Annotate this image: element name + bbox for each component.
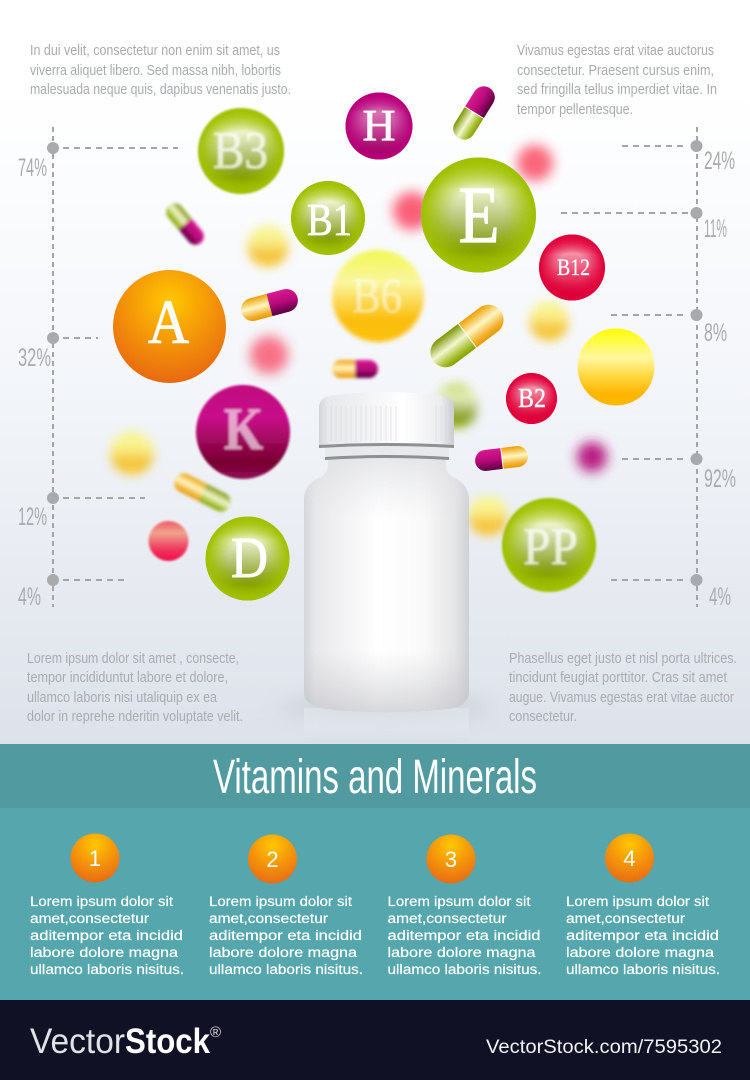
blurred red sphere [393,192,431,230]
vitamin B3 sphere: B3 [213,122,268,180]
blurred green sphere [434,384,478,428]
text block: top right [517,43,717,118]
vitamin H sphere: H [362,101,396,150]
step 3: labore dolore magna [388,945,536,960]
blurred yellow sphere [468,496,508,536]
step 3: 3 [445,847,457,872]
step 3: Lorem ipsum dolor sit [388,894,531,909]
step 2: amet,consectetur [209,911,329,926]
vitamin D sphere: D [231,525,268,590]
panel: steps [0,808,750,1000]
step 4: ullamco laboris nisitus. [566,962,720,977]
yellow sphere [578,328,654,406]
vitamin PP sphere [502,498,596,592]
step 4: aditempor eta incidid [566,928,719,943]
text block: top left [30,43,291,98]
vitamin B6 sphere: B6 [352,267,402,323]
vitamin B3 sphere [198,108,284,194]
text block: top left: In dui velit, consectetur non enim sit amet, us [30,43,280,59]
text block: bottom left: tempor incididuntut labore et dolore, [27,670,228,686]
step 3 [388,834,542,977]
step 1: aditempor eta incidid [30,928,183,943]
step 1: ullamco laboris nisitus. [30,962,184,977]
marker 11% [561,207,727,243]
blurred red sphere [250,336,288,374]
bottle body [304,458,469,712]
vitamin E sphere [421,158,536,272]
marker 4% right: 4% [709,583,731,611]
vitamin B2 sphere: B2 [518,383,546,413]
footer logo: Vector [30,1022,125,1061]
vitamin D sphere [206,516,290,600]
bottle reflection [304,708,469,743]
capsule: orange and magenta, blurred [332,360,378,378]
vitamin H sphere [346,92,412,160]
vitamin A sphere: A [148,289,189,357]
step 2: 2 [266,847,279,872]
bottle [278,392,494,743]
step 4 [566,834,720,977]
marker 12%: 12% [18,503,47,531]
capsule: magenta and orange [474,445,529,472]
vitamin PP sphere: PP [523,518,578,576]
blurred yellow sphere [110,431,154,475]
text block: top right: sed fringilla tellus imperdiet vitae. In [517,82,717,98]
bottle shadow [278,699,494,717]
step 1: 1 [89,846,101,871]
vitamin E sphere: E [458,172,500,260]
marker 32% [18,332,98,372]
step 1: labore dolore magna [30,945,179,960]
step 2: labore dolore magna [209,945,358,960]
step 3: amet,consectetur [388,911,507,926]
marker 8% [611,309,727,347]
vitamin B1 sphere [291,181,365,255]
footer logo: Stock [125,1022,210,1061]
capsule: green and magenta, blurred [163,200,207,248]
vitamin B12 sphere: B12 [557,255,590,280]
marker 92% [622,453,736,493]
step 2 [209,834,363,977]
step 1 [30,834,184,977]
marker 32%: 32% [18,344,51,372]
footer logo [30,1022,221,1061]
text block: bottom right: consectetur. [509,709,577,725]
marker 74% [18,142,178,182]
title: Vitamins and Minerals [213,751,537,804]
text block: bottom left: Lorem ipsum dolor sit amet , consecte, [27,651,239,667]
text block: bottom left [27,651,243,725]
step 4: amet,consectetur [566,911,686,926]
blurred background spheres [110,145,607,536]
step 1: Lorem ipsum dolor sit [30,894,173,909]
text block: bottom right [509,651,737,725]
vitamin B6 sphere [332,250,424,342]
footer logo: ® [210,1024,221,1041]
title band [0,744,750,808]
text block: bottom left: dolor in reprehe nderitin voluptate velit. [27,709,243,725]
blurred red sphere [517,145,553,181]
vitamin B1 sphere: B1 [307,195,352,245]
vitamin A sphere [113,270,226,383]
marker 8%: 8% [704,319,727,347]
small red sphere [148,521,188,561]
bottle neck [325,446,449,460]
blurred magenta sphere [577,442,607,472]
bottle cap [319,392,454,448]
step 3: aditempor eta incidid [388,928,540,943]
blurred yellow sphere [247,225,289,267]
step 2: ullamco laboris nisitus. [209,962,363,977]
step 4: 4 [623,846,636,871]
capsule: large green and orange [424,299,510,373]
text block: top right: Vivamus egestas erat vitae auctorus [517,43,714,59]
marker 12% [18,492,145,531]
text block: bottom right: tincidunt feugiat porttitor. Cras sit amet [509,670,727,686]
text block: bottom left: ullamco laboris nisi utaliquip ex ea [27,690,218,706]
step 3: ullamco laboris nisitus. [388,962,542,977]
blurred yellow sphere [529,301,569,341]
text block: top left: viverra aliquet libero. Sed massa nibh, lobortis [30,63,281,79]
marker 4% right [611,574,731,611]
left percentage scale [18,127,178,611]
step 1: amet,consectetur [30,911,150,926]
step 4: labore dolore magna [566,945,715,960]
step 4: Lorem ipsum dolor sit [566,894,709,909]
step 2: aditempor eta incidid [209,928,362,943]
capsule: orange and green, blurred [171,470,234,515]
text block: top right: tempor pellentesque. [517,102,633,118]
marker 74%: 74% [18,154,47,182]
text block: top right: consectetur. Praesent cursus enim, [517,63,714,79]
marker 4% [18,574,124,611]
text block: top left: malesuada neque quis, dapibus venenatis justo. [30,82,291,98]
footer image id: VectorStock.com/7595302 [486,1037,722,1058]
vitamin B12 sphere [539,234,605,300]
capsule: orange and magenta [239,286,300,324]
marker 4%: 4% [18,583,41,611]
marker 24% [622,140,735,175]
capsule: magenta and green, top [449,82,499,144]
right percentage scale [561,127,736,611]
vitamin K sphere [196,385,290,479]
footer [0,1000,750,1080]
vitamin B2 sphere [506,373,557,424]
background [0,0,750,744]
vitamin K sphere: K [224,396,263,462]
step 2: Lorem ipsum dolor sit [209,894,352,909]
